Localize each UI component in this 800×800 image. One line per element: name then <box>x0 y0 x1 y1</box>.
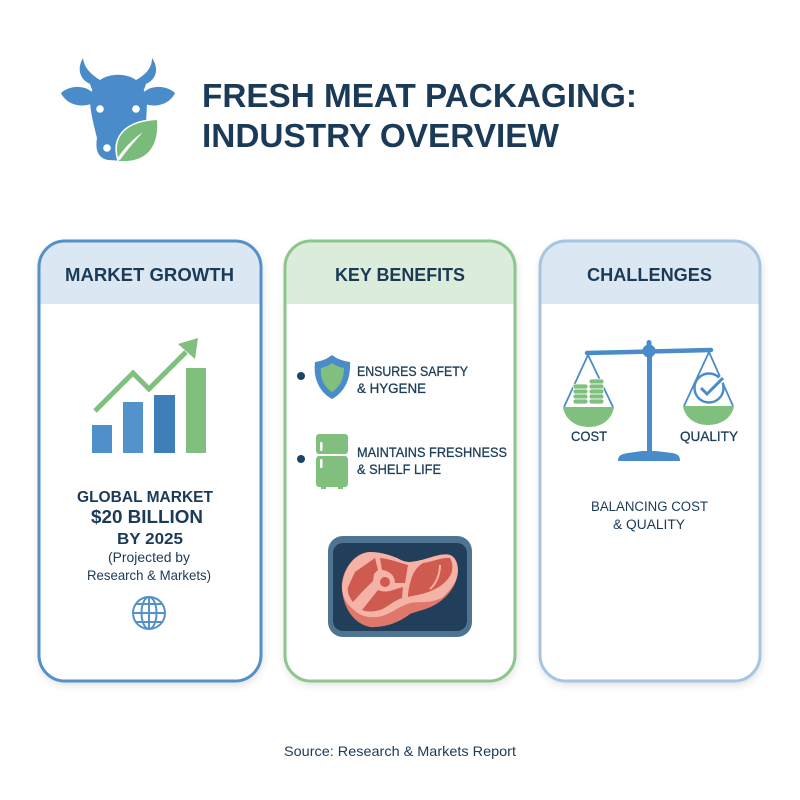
benefit: freshness and shelf life: MAINTAINS FRESHNESS <box>357 445 507 460</box>
title <box>202 77 637 154</box>
heading: key benefits: KEY BENEFITS <box>335 265 465 285</box>
market figure text: BY 2025 <box>117 531 183 548</box>
title: FRESH MEAT PACKAGING: <box>202 77 637 114</box>
icon: balance scale <box>563 340 734 461</box>
benefit: safety and hygiene: ENSURES SAFETY <box>357 364 468 379</box>
panel: market growth <box>38 240 262 682</box>
market figure text: $20 BILLION <box>91 507 203 527</box>
market figure text <box>77 489 213 583</box>
title: INDUSTRY OVERVIEW <box>202 117 560 154</box>
caption: balancing cost and quality <box>591 499 708 532</box>
market figure text: GLOBAL MARKET <box>77 489 213 506</box>
market figure text: Research & Markets) <box>87 567 211 583</box>
benefit: freshness and shelf life <box>297 434 507 489</box>
benefit: safety and hygiene: & HYGENE <box>357 381 426 396</box>
caption: balancing cost and quality: & QUALITY <box>613 517 685 532</box>
scale labels: QUALITY <box>680 428 739 444</box>
icon: meat tray <box>328 536 472 637</box>
source note: Source: Research & Markets Report <box>284 743 516 759</box>
heading: challenges: CHALLENGES <box>587 265 712 285</box>
icon: globe <box>133 597 165 629</box>
panel: challenges <box>539 240 761 682</box>
icon: cow head with leaf <box>61 58 175 161</box>
market figure text: (Projected by <box>108 549 190 565</box>
scale labels <box>571 428 739 444</box>
panel: key benefits <box>284 240 516 682</box>
benefit: safety and hygiene <box>297 355 468 399</box>
benefit: freshness and shelf life: & SHELF LIFE <box>357 462 441 477</box>
scale labels: COST <box>571 428 607 444</box>
caption: balancing cost and quality: BALANCING COST <box>591 499 708 514</box>
chart: rising bars with arrow <box>92 338 206 453</box>
heading: market growth: MARKET GROWTH <box>65 265 234 285</box>
